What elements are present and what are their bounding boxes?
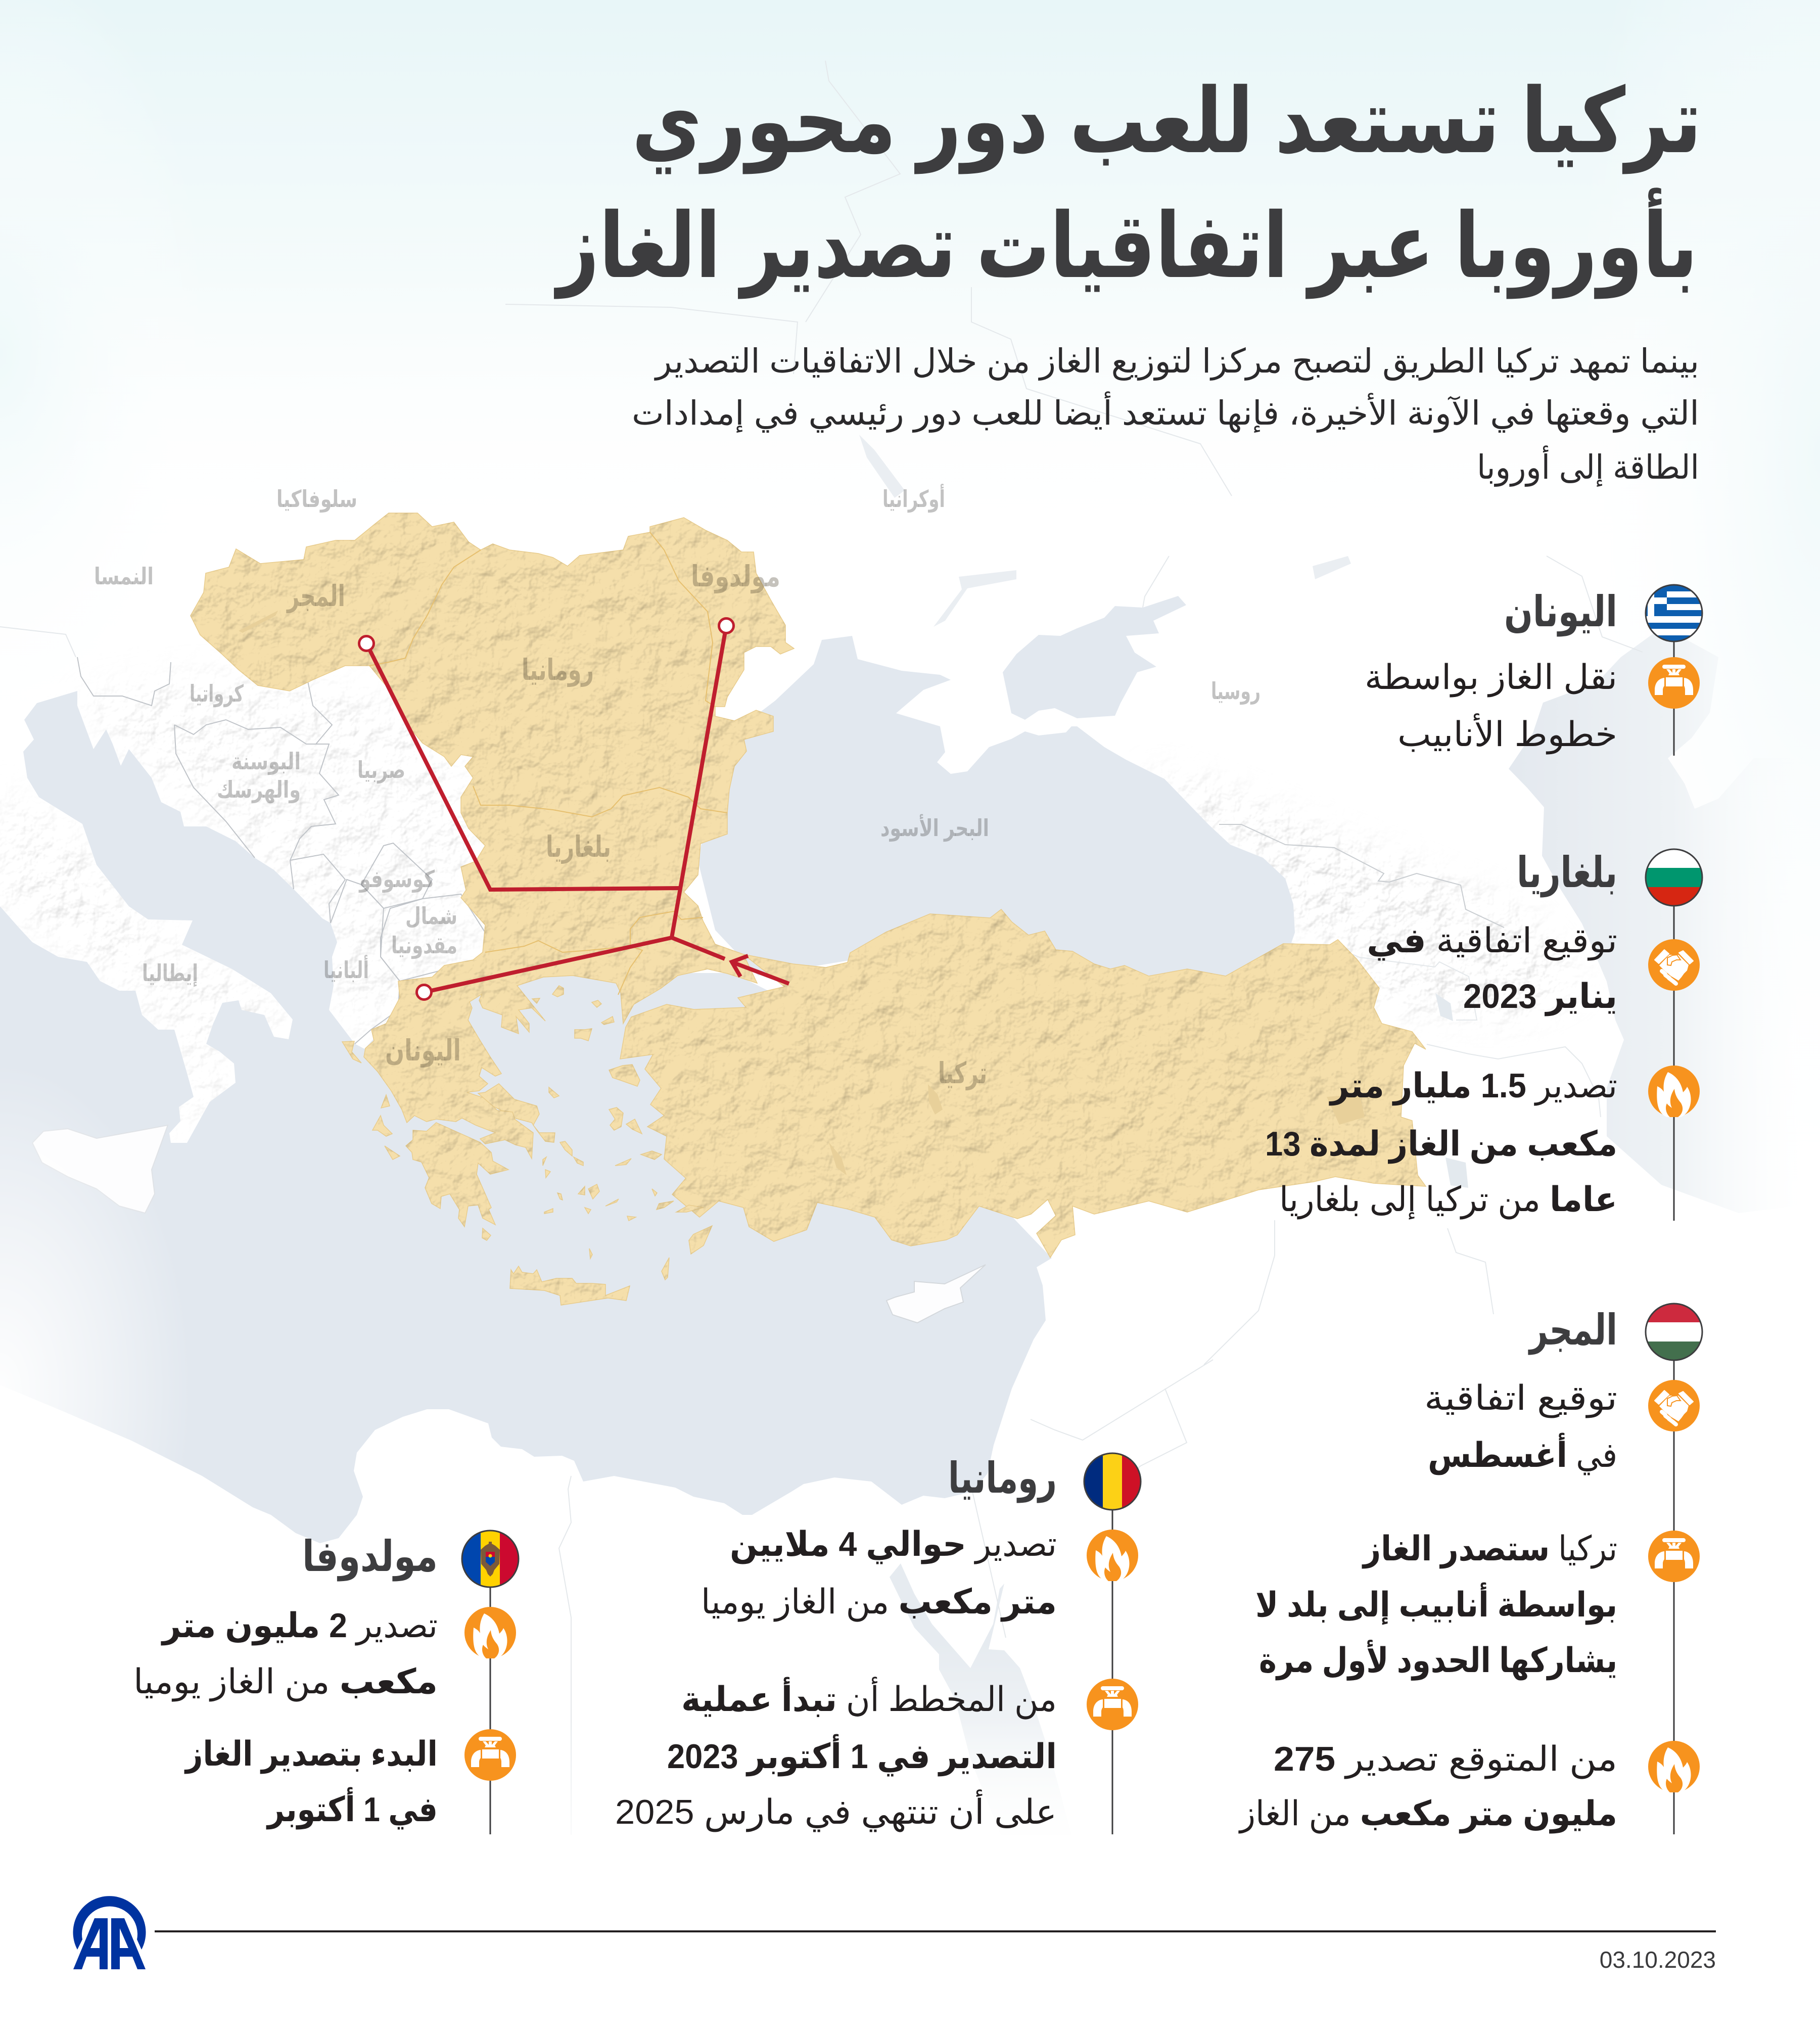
text: export schedule [615,1677,1057,1832]
icon: pipeline valve [1648,1531,1700,1582]
map labels: سلوفاكيا [276,486,357,513]
text: pipeline transport [1365,658,1617,755]
text: start date: البدء بتصدير الغاز [184,1735,438,1774]
text: 4 million daily [701,1525,1057,1622]
icon: flame [464,1607,516,1658]
text: start date [184,1735,438,1830]
footer rule [155,1930,1716,1932]
text: export volume: عاما من تركيا إلى بلغاريا [1279,1180,1617,1220]
text: non-neighbouring export: بواسطة أنابيب إلى بلد لا [1255,1582,1617,1625]
Sea of Azov [1003,596,1186,720]
map labels: والهرسك [217,776,301,803]
terrain shading: Caucasus [1179,773,1570,1025]
text: 4 million daily: تصدير حوالي 4 ملايين [730,1525,1057,1564]
relief shading on highlighted countries [152,505,1445,1314]
text: export schedule: على أن تنتهي في مارس 2025 [615,1789,1057,1832]
map labels: شمال [405,903,457,929]
pipeline from junction to Bosphorus [672,938,725,959]
icon: flame [1648,1741,1700,1792]
Peloponnese [406,1123,508,1227]
intro text: الطاقة إلى أوروبا [1477,445,1699,487]
Hungary, Romania, Moldova, Bulgaria, Greece, Thrace [191,513,794,1159]
node: Hungary [359,636,374,651]
text: pipeline transport: نقل الغاز بواسطة [1365,658,1617,698]
map labels: البوسنة [231,748,301,775]
map labels: كرواتيا [190,680,244,707]
Balkan and Caucasus borders [77,657,1601,1117]
flag: Romania [1084,1453,1141,1510]
heading: Bulgaria: بلغاريا [1517,849,1617,898]
timeline line [489,1587,491,1834]
text: pipeline transport: خطوط الأنابيب [1397,713,1617,755]
Red Sea and gulfs [890,1563,1071,1835]
text: export volume: تصدير 1.5 مليار متر [1329,1067,1617,1106]
Caspian Sea [1509,627,1820,1213]
terrain shading: Balkans and Italy [0,679,481,1115]
left sea fade [0,1061,192,1719]
faint borders [0,61,1643,1835]
text: export volume [1265,1067,1617,1220]
flag: Hungary [1646,1304,1702,1360]
map labels [94,484,1261,1091]
intro text: بينما تمهد تركيا الطريق لتصبح مركزا لتوزيع الغاز من خلال الاتفاقيات التصدير [654,342,1699,381]
map labels: رومانيا [522,654,594,687]
heading: Moldova: مولدوفا [302,1533,438,1582]
map labels: تركيا [938,1057,987,1091]
heading: Hungary: المجر [1528,1306,1617,1355]
logo: AA [73,1896,146,1969]
map labels: النمسا [94,563,154,589]
intro text: التي وقعتها في الآونة الأخيرة، فإنها تستعد أيضا للعب دور رئيسي في إمدادات [632,391,1699,433]
text: start date: في 1 أكتوبر [266,1787,438,1830]
text: non-neighbouring export: يشاركها الحدود لأول مرة [1259,1639,1617,1681]
date: 03.10.2023 [1600,1947,1716,1973]
icon: flame [1648,1066,1700,1117]
highlighted countries [152,505,1445,1314]
text: export schedule: من المخطط أن تبدأ عملية [681,1677,1057,1720]
text: agreement in August: في أغسطس [1428,1432,1617,1475]
timeline line [1673,906,1675,1221]
flag: Moldova [462,1531,519,1587]
map labels: صربيا [357,757,405,783]
icon: handshake [1648,939,1700,991]
text: agreement in August [1424,1379,1617,1475]
icon: handshake [1648,1380,1700,1431]
map labels: البحر الأسود [880,814,989,842]
text: export schedule: التصدير في 1 أكتوبر 2023 [667,1734,1057,1777]
text: agreement in August: توقيع اتفاقية [1424,1379,1617,1418]
Mediterranean, Adriatic and Aegean [0,691,1052,1543]
node: Moldova [719,619,734,633]
panel: Romania [615,1453,1141,1834]
map labels: اليونان [385,1034,461,1068]
map labels: مقدونيا [391,932,457,959]
map labels: أوكرانيا [882,484,945,513]
reservoirs and lakes [859,435,1351,627]
pipeline to Greece [424,938,672,992]
Sicily [32,1125,168,1213]
panel: Greece [1365,585,1702,756]
text: 275 million [1238,1740,1617,1834]
arrow: flow from Turkey [732,956,789,984]
map labels: كوسوفو [358,866,435,893]
text: 275 million: مليون متر مكعب من الغاز [1238,1794,1617,1834]
Turkey [620,909,1426,1258]
text: 2 million daily: مكعب من الغاز يوميا [133,1662,438,1702]
lakes Sevan and Urmia [1435,993,1468,1188]
text: agreement January 2023: توقيع اتفاقية في [1367,921,1617,961]
text: 275 million: من المتوقع تصدير 275 [1274,1740,1617,1779]
heading: Greece: اليونان [1504,588,1617,637]
timeline line [1112,1510,1113,1834]
text: agreement January 2023 [1367,921,1617,1016]
text: 4 million daily: متر مكعب من الغاز يوميا [701,1583,1057,1622]
icon: pipeline valve [464,1729,516,1781]
panel: Hungary [1238,1304,1702,1834]
pipeline to Moldova [672,626,726,938]
text: non-neighbouring export: تركيا ستصدر الغاز [1362,1530,1617,1569]
map labels: مولدوفا [691,560,780,594]
flag: Greece [1646,585,1702,641]
icon: pipeline valve [1087,1679,1138,1730]
panel: Moldova [133,1531,519,1834]
lakes in highlighted countries [239,611,1365,1175]
pipeline to Hungary [366,643,679,890]
text: export volume: مكعب من الغاز لمدة 13 [1265,1125,1617,1164]
timeline line [1673,1360,1675,1834]
text: non-neighbouring export [1255,1530,1617,1681]
Evia [478,1084,555,1142]
map labels: المجر [286,580,345,614]
text: 2 million daily [133,1606,438,1702]
timeline line [1673,641,1675,756]
heading: Romania: رومانيا [948,1454,1057,1503]
intro text [632,342,1699,487]
Black Sea [697,636,1295,991]
icon: flame [1087,1530,1138,1581]
panel: Bulgaria [1265,849,1702,1221]
flag: Bulgaria [1646,849,1702,906]
map labels: إيطاليا [142,960,198,987]
map labels: ألبانيا [323,955,369,983]
map labels: روسيا [1211,678,1261,705]
text: agreement January 2023: يناير 2023 [1463,977,1617,1016]
map labels: بلغاريا [546,830,611,864]
Greek islands [342,986,712,1280]
node: Greece [416,985,432,1000]
icon: pipeline valve [1648,657,1700,709]
gas pipelines [359,619,789,1000]
title [553,71,1702,299]
bottom fade [0,1719,1820,1870]
Crete [510,1266,630,1305]
internal borders [369,532,727,995]
text: 2 million daily: تصدير 2 مليون متر [161,1606,438,1646]
Cyprus [886,1265,986,1323]
